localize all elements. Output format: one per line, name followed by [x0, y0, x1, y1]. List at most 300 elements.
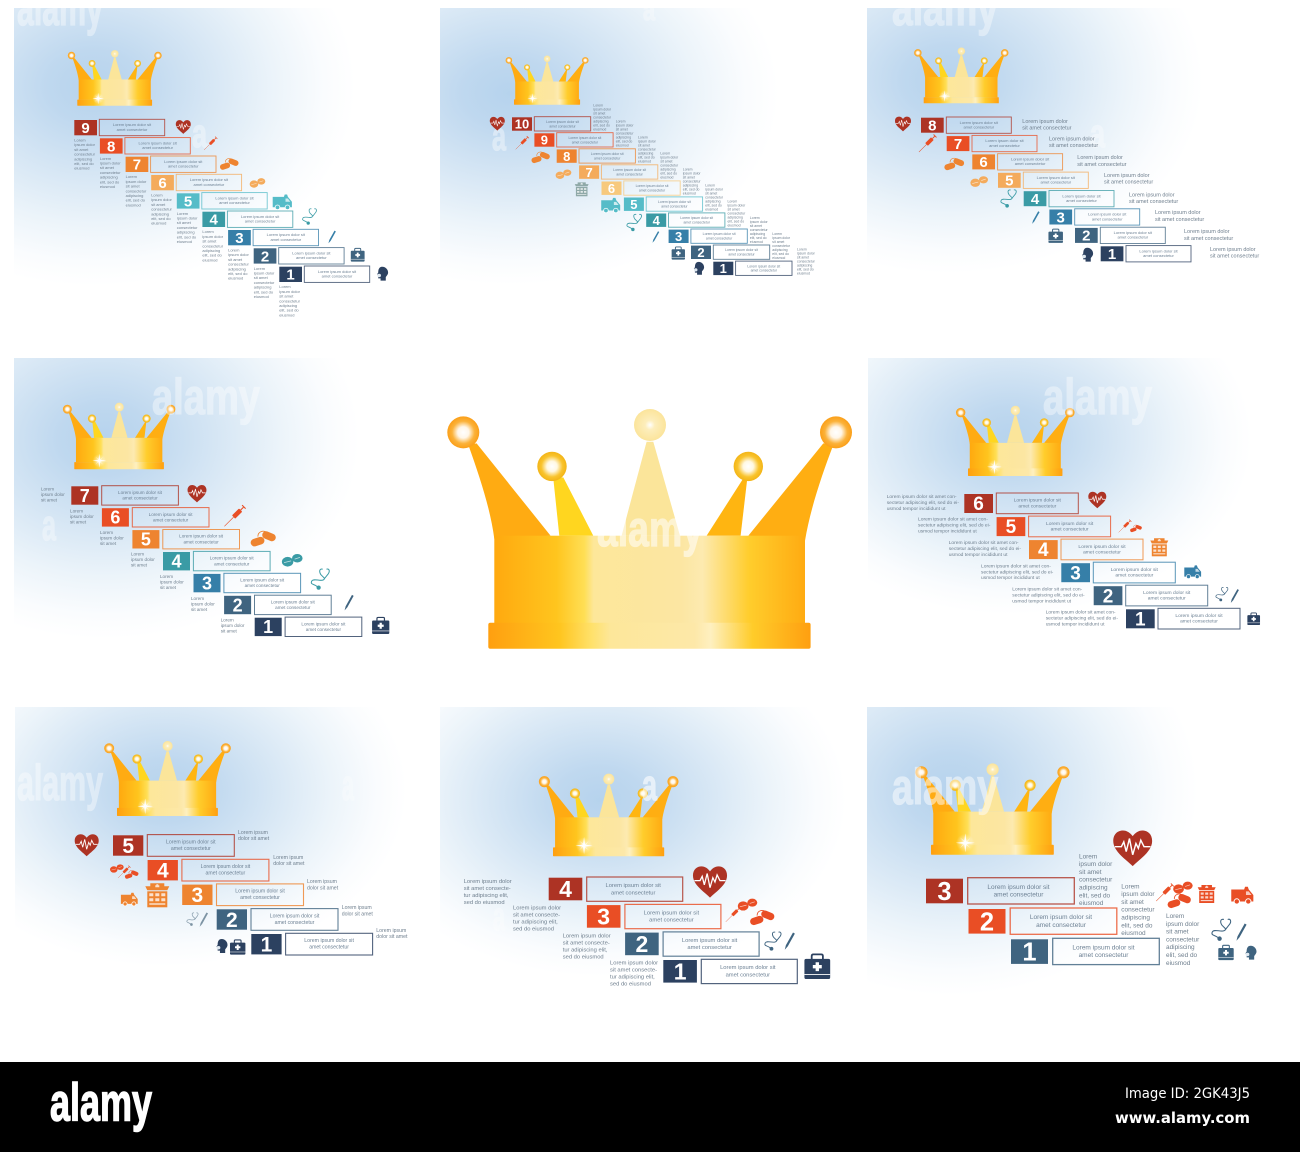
side text 1: dolor sit amet: [376, 934, 408, 940]
panel: seven-step staircase: [14, 358, 389, 648]
side text 5: eiusmod: [705, 208, 718, 212]
crown: [914, 47, 1008, 103]
label box 6: amet consectetur: [1015, 161, 1046, 166]
side text 4: usmod tempor incididunt ut: [949, 552, 1008, 558]
number badge 3: [587, 903, 620, 929]
side text 5: ipsum dolor: [705, 188, 724, 192]
side text 6: sit amet: [70, 519, 87, 524]
number badge 1: 1: [263, 617, 273, 637]
panel: eight-step staircase: [867, 0, 1259, 288]
step 4: [148, 855, 305, 882]
side text 3: sit amet: [1079, 869, 1102, 876]
label box 4: [193, 551, 270, 571]
label box 6: amet consectetur: [639, 188, 666, 192]
label box 2: Lorem ipsum dolor sit: [292, 251, 331, 256]
label box 5: amet consectetur: [183, 539, 219, 544]
side text 6: consectetur: [151, 207, 173, 212]
step 2: [968, 883, 1155, 937]
icon: stethoscope: [1001, 190, 1016, 208]
side text 6: consectetur: [683, 180, 701, 184]
number badge 2: 2: [226, 909, 238, 932]
number badge 6: 6: [973, 494, 984, 515]
side text 6: sit amet: [683, 176, 695, 180]
number badge 4: [549, 876, 582, 902]
side text 1: Lorem ipsum dolor: [610, 960, 658, 966]
icon: stethoscope: [303, 209, 316, 225]
icon: tablets, syringe and pills: [110, 864, 139, 879]
number badge 10: 10: [515, 117, 529, 132]
label box 6: [176, 174, 242, 191]
side text 5: ipsum dolor: [100, 535, 124, 540]
crown: [104, 741, 231, 816]
label box 9: amet consectetur: [117, 127, 148, 132]
step 7: [579, 152, 679, 180]
side text 2: Lorem ipsum dolor: [563, 933, 611, 939]
label box 4: [227, 211, 293, 227]
panel background: [867, 707, 1217, 997]
side text 1: ipsum dolor: [797, 252, 816, 256]
number badge 2: 2: [636, 931, 648, 957]
side text 5: adipiscing: [705, 200, 721, 204]
icon: heart: [490, 117, 505, 131]
side text 5: sit amet: [705, 192, 717, 196]
side text 6: sit amet: [151, 202, 166, 207]
step 6: [70, 508, 209, 528]
label box 8: amet consectetur: [963, 124, 995, 129]
panel background: [868, 358, 1268, 648]
step 3: [160, 573, 301, 593]
icon: syringe: [515, 136, 529, 150]
side text 3: ipsum dolor: [1079, 861, 1113, 868]
label box 1: Lorem ipsum dolor sit: [720, 965, 776, 971]
side text 3: eiusmod: [1079, 900, 1104, 907]
number badge 7: 7: [585, 165, 593, 180]
icon: pills: [944, 157, 965, 171]
side text 6: sectetur adipiscing elit, sed do ei-: [887, 500, 959, 506]
label box 7: amet consectetur: [616, 172, 644, 176]
icon: stethoscope: [311, 569, 329, 590]
side text 5: Lorem: [100, 530, 113, 535]
icon: pills: [219, 158, 239, 170]
side text 6: adipiscing: [683, 184, 698, 188]
step 2: [563, 931, 759, 960]
label box 3: Lorem ipsum dolor sit: [267, 232, 306, 237]
side text 2: sit amet: [191, 607, 208, 612]
side text 3: Lorem ipsum dolor sit amet con-: [981, 563, 1051, 569]
side text 3: ipsum dolor: [750, 220, 769, 224]
side text 2: elit, sed do: [772, 252, 789, 256]
side text 3: Lorem: [750, 216, 760, 220]
label box 6: amet consectetur: [194, 182, 225, 187]
side text 9: elit, sed do: [616, 140, 632, 144]
label box 2: [1100, 227, 1165, 244]
label box 1: amet consectetur: [751, 269, 778, 273]
label box 1: [1126, 246, 1191, 262]
panel background: [14, 8, 394, 298]
number badge 9: 9: [81, 120, 90, 137]
label box 3: amet consectetur: [706, 237, 733, 241]
label box 2: amet consectetur: [275, 605, 311, 610]
side text 3: Lorem: [1079, 853, 1097, 860]
label box 1: [701, 959, 797, 984]
label box 3: [253, 229, 318, 246]
label box 2: Lorem ipsum dolor sit: [682, 938, 738, 944]
label box 8: [125, 138, 190, 154]
icon: medical kit: [1247, 613, 1260, 625]
side text 3: sit amet: [750, 224, 762, 228]
label box 6: Lorem ipsum dolor sit: [149, 512, 193, 517]
side text 1: adipiscing: [1166, 944, 1195, 951]
label box 5: Lorem ipsum dolor sit: [215, 196, 255, 201]
number badge 3: [926, 878, 963, 906]
icon: medical kit: [1048, 229, 1063, 243]
label box 5: [1029, 516, 1111, 537]
side text 4: Lorem ipsum: [273, 855, 303, 861]
number badge 5: [113, 835, 143, 858]
number badge 4: 4: [157, 860, 169, 882]
side text 1: sit amet: [797, 256, 809, 260]
label box 2: amet consectetur: [275, 920, 315, 926]
side text 3: elit, sed do: [1079, 892, 1111, 899]
number badge 2: 2: [261, 248, 269, 265]
label box 1: Lorem ipsum dolor sit: [1139, 248, 1178, 253]
side text 6: sit amet consectetur: [1077, 162, 1127, 168]
label box 5: amet consectetur: [661, 204, 688, 208]
side text 2: eiusmod: [772, 256, 785, 260]
number badge 4: [1024, 191, 1046, 208]
icon: heart: [188, 485, 206, 502]
side text 2: consectetur: [254, 280, 275, 285]
side text 4: dolor sit amet: [273, 861, 305, 867]
side text 4: ipsum dolor: [131, 557, 155, 562]
label box 4: amet consectetur: [245, 218, 276, 223]
icon: heart: [895, 117, 911, 131]
side text 2: sit amet consectetur: [1184, 236, 1233, 242]
label box 8: [946, 117, 1011, 133]
label box 2: [1010, 908, 1117, 934]
number badge 1: [251, 934, 282, 956]
side text 1: ipsum dolor: [279, 289, 301, 294]
number badge 2: [224, 595, 251, 615]
side text 4: consectetur: [728, 212, 746, 216]
icon: heart: [75, 834, 99, 856]
label box 3: amet consectetur: [649, 918, 694, 924]
step 3: [228, 229, 318, 281]
icon: medical kit: [372, 617, 389, 634]
number badge 2: 2: [1082, 228, 1090, 245]
label box 8: Lorem ipsum dolor sit: [138, 141, 178, 146]
side text 1: eiusmod: [1166, 960, 1191, 967]
label box 8: amet consectetur: [594, 156, 621, 160]
side text 8: Lorem: [100, 156, 112, 161]
side text 5: dolor sit amet: [238, 836, 270, 842]
label box 7: amet consectetur: [989, 143, 1021, 148]
crown: [539, 774, 678, 856]
label box 4: [182, 859, 269, 881]
side text 5: consectetur: [705, 196, 724, 200]
label box 4: [668, 213, 725, 227]
icon: tablets: [282, 554, 303, 567]
side text 1: sit amet: [279, 294, 294, 299]
step 3: [669, 216, 769, 244]
website: www.alamy.com: [1115, 1109, 1250, 1127]
icon: stethoscope and pen: [187, 912, 208, 927]
side text 3: ipsum dolor: [160, 579, 184, 584]
side text 4: adipiscing: [202, 248, 220, 253]
side text 3: sit amet: [228, 257, 243, 262]
label box 1: Lorem ipsum dolor sit: [318, 269, 357, 274]
number badge 4: [1029, 540, 1058, 561]
side text 3: Lorem: [160, 574, 173, 579]
number badge 3: 3: [202, 573, 212, 593]
label box 2: Lorem ipsum dolor sit: [1030, 914, 1092, 921]
side text 1: Lorem ipsum dolor: [1210, 247, 1256, 253]
side text 3: sit amet: [160, 585, 177, 590]
side text 3: elit, sed do: [228, 271, 248, 276]
icon: patient head and medical kit: [216, 939, 245, 955]
icon: syringe and pills: [1118, 520, 1142, 533]
label box 3: Lorem ipsum dolor sit: [703, 232, 736, 236]
label box 3: Lorem ipsum dolor sit: [1111, 567, 1159, 573]
panel background: [14, 358, 384, 648]
side text 6: ipsum dolor: [70, 514, 94, 519]
side text 3: usmod tempor incididunt ut: [981, 575, 1040, 581]
side text 1: Lorem ipsum dolor sit amet con-: [1046, 610, 1116, 616]
side text 9: Lorem: [616, 120, 626, 124]
step 1: [1101, 246, 1259, 263]
side text 7: Lorem: [41, 487, 54, 492]
label box 4: Lorem ipsum dolor sit: [1062, 193, 1102, 198]
side text 3: consectetur: [228, 262, 249, 267]
label box 4: amet consectetur: [611, 890, 655, 896]
side text 8: adipiscing: [638, 152, 653, 156]
side text 7: ipsum dolor: [126, 179, 147, 184]
label box 7: [102, 486, 178, 505]
side text 3: sit amet consecte-: [513, 913, 560, 919]
side text 8: Lorem: [638, 136, 648, 140]
step 5: [918, 516, 1111, 538]
label box 4: Lorem ipsum dolor sit: [241, 214, 280, 219]
label box 1: [1158, 608, 1240, 629]
side text 2: consectetur: [772, 244, 791, 248]
side text 3: dolor sit amet: [307, 885, 339, 891]
side text 2: consectetur: [1121, 907, 1155, 914]
side text 8: consectetur: [638, 148, 657, 152]
side text 8: sit amet consectetur: [1022, 125, 1072, 131]
side text 8: eiusmod: [100, 184, 115, 189]
side text 7: sit amet consectetur: [1049, 143, 1098, 149]
number badge 3: [1049, 209, 1072, 226]
label box 3: [1093, 562, 1175, 583]
side text 4: eiusmod: [728, 224, 741, 228]
side text 1: consectetur: [797, 260, 816, 264]
number badge 2: 2: [980, 908, 994, 936]
label box 9: Lorem ipsum dolor sit: [113, 122, 152, 127]
number badge 6: 6: [158, 175, 167, 192]
side text 6: Lorem: [70, 508, 83, 513]
icon: medical kit: [672, 247, 685, 260]
panel background: [867, 8, 1237, 288]
side text 4: Lorem: [728, 200, 737, 204]
label box 1: Lorem ipsum dolor sit: [301, 621, 346, 626]
side text 5: ipsum dolor: [177, 216, 198, 221]
side text 6: ipsum dolor: [683, 172, 701, 176]
label box 8: amet consectetur: [142, 145, 174, 150]
step 6: [151, 174, 242, 226]
side text 1: elit, sed do: [279, 308, 299, 313]
side text 4: Lorem ipsum dolor sit amet con-: [949, 540, 1019, 546]
label box 7: [972, 135, 1037, 152]
image id: Image ID: 2GK43J5: [1125, 1086, 1250, 1102]
label box 5: [202, 193, 267, 209]
side text 1: usmod tempor incididunt ut: [1046, 621, 1105, 627]
side text 2: elit, sed do: [1121, 922, 1153, 929]
icon: ambulance: [121, 893, 138, 906]
side text 5: consectetur: [177, 225, 198, 230]
side text 2: adipiscing: [772, 248, 788, 252]
side text 1: adipiscing: [279, 303, 297, 308]
watermark: alamy: [1043, 369, 1152, 425]
side text 2: ipsum dolor: [1121, 891, 1155, 898]
label box 5: [646, 197, 703, 211]
step 5: [624, 184, 724, 212]
icon: patient head: [1082, 248, 1093, 262]
watermark: alamy: [597, 501, 703, 557]
label box 2: [713, 245, 770, 259]
label box 4: Lorem ipsum dolor sit: [680, 216, 713, 220]
label box 2: amet consectetur: [1148, 596, 1186, 602]
number badge 7: [947, 136, 969, 153]
number badge 1: [1011, 939, 1048, 967]
side text 1: Lorem: [1166, 913, 1184, 920]
label box 1: amet consectetur: [726, 973, 770, 979]
side text 2: elit, sed do: [254, 289, 274, 294]
label box 6: [132, 508, 209, 527]
side text 1: elit, sed do: [797, 268, 814, 272]
label box 6: Lorem ipsum dolor sit: [1014, 498, 1062, 504]
step 2: [191, 595, 331, 615]
step 2: [254, 248, 344, 299]
side text 5: Lorem: [705, 184, 715, 188]
watermark: alamy: [152, 369, 260, 425]
footer logo: alamy: [50, 1074, 152, 1132]
step 10: [512, 104, 612, 132]
step 5: [113, 830, 270, 858]
crown: [63, 403, 175, 469]
side text 8: elit, sed do: [100, 179, 120, 184]
number badge 2: [217, 909, 247, 932]
side text 1: elit, sed do: [1166, 952, 1198, 959]
label box 2: Lorem ipsum dolor sit: [1114, 230, 1153, 235]
side text 1: sit amet consectetur: [1210, 254, 1259, 260]
side text 4: sit amet: [131, 563, 148, 568]
step 3: [981, 562, 1175, 584]
label box 3: [968, 878, 1074, 904]
step 3: [926, 853, 1113, 907]
side text 9: adipiscing: [616, 136, 631, 140]
number badge 7: 7: [80, 486, 90, 506]
side text 4: Lorem ipsum dolor: [1129, 192, 1175, 198]
label box 3: amet consectetur: [1092, 216, 1123, 221]
icon: patient head: [377, 267, 388, 281]
panel background: [15, 707, 415, 997]
label box 9: amet consectetur: [572, 140, 599, 144]
side text 2: adipiscing: [254, 285, 271, 290]
number badge 3: 3: [235, 230, 244, 247]
side text 2: eiusmod: [254, 294, 269, 299]
label box 3: amet consectetur: [240, 895, 280, 901]
watermark fragment: a: [42, 501, 56, 550]
step 4: [202, 211, 293, 262]
side text 7: sit amet: [41, 498, 58, 503]
label box 8: [579, 149, 635, 163]
step 1: [251, 928, 408, 956]
label box 1: amet consectetur: [1079, 952, 1129, 959]
panel: nine-step staircase: [14, 0, 394, 317]
label box 1: [304, 266, 370, 282]
number badge 7: 7: [133, 157, 141, 174]
number badge 1: 1: [286, 267, 295, 284]
side text 5: sit amet: [177, 220, 192, 225]
number badge 5: 5: [141, 530, 151, 550]
side text 2: adipiscing: [1121, 914, 1150, 922]
number badge 6: 6: [608, 181, 615, 196]
number badge 1: 1: [674, 958, 687, 984]
label box 1: amet consectetur: [1180, 619, 1218, 625]
side text 9: sit amet: [616, 128, 628, 132]
side text 1: sit amet: [1166, 929, 1189, 936]
label box 7: Lorem ipsum dolor sit: [613, 168, 646, 172]
label box 4: amet consectetur: [1066, 198, 1098, 203]
side text 1: sectetur adipiscing elit, sed do ei-: [1046, 616, 1118, 622]
label box 3: [625, 904, 721, 929]
label box 1: Lorem ipsum dolor sit: [304, 938, 354, 944]
step 1: [713, 248, 816, 276]
label box 9: Lorem ipsum dolor sit: [568, 136, 601, 140]
side text 2: Lorem: [1121, 883, 1140, 890]
panel background: [440, 707, 860, 1007]
label box 6: [998, 154, 1063, 170]
side text 2: sit amet: [254, 275, 269, 280]
side text 4: sectetur adipiscing elit, sed do ei-: [949, 546, 1021, 552]
step 3: [513, 903, 721, 933]
number badge 8: [921, 118, 944, 134]
side text 4: Lorem ipsum dolor: [464, 879, 512, 885]
side text 8: sit amet: [100, 165, 115, 170]
label box 5: Lorem ipsum dolor sit: [1046, 521, 1094, 527]
label box 2: amet consectetur: [1117, 235, 1149, 240]
side text 2: Lorem: [191, 596, 204, 601]
step 7: [126, 156, 216, 207]
label box 4: amet consectetur: [214, 561, 250, 566]
label box 3: Lorem ipsum dolor sit: [1088, 212, 1127, 217]
label box 9: [557, 133, 613, 147]
label box 3: amet consectetur: [1115, 573, 1154, 579]
side text 4: sed do eiusmod: [464, 900, 505, 906]
label box 2: amet consectetur: [687, 945, 732, 951]
icon: hospital: [575, 182, 589, 196]
side text 6: elit, sed do: [683, 188, 700, 192]
step 3: [1049, 209, 1204, 226]
side text 2: Lorem: [254, 266, 266, 271]
side text 10: adipiscing: [593, 120, 609, 124]
side text 9: consectetur: [616, 132, 634, 136]
number badge 2: [968, 908, 1006, 936]
side text 7: consectetur: [660, 164, 679, 168]
side text 4: Lorem: [202, 229, 214, 234]
number badge 5: 5: [630, 197, 638, 212]
icon: pills: [531, 151, 551, 164]
